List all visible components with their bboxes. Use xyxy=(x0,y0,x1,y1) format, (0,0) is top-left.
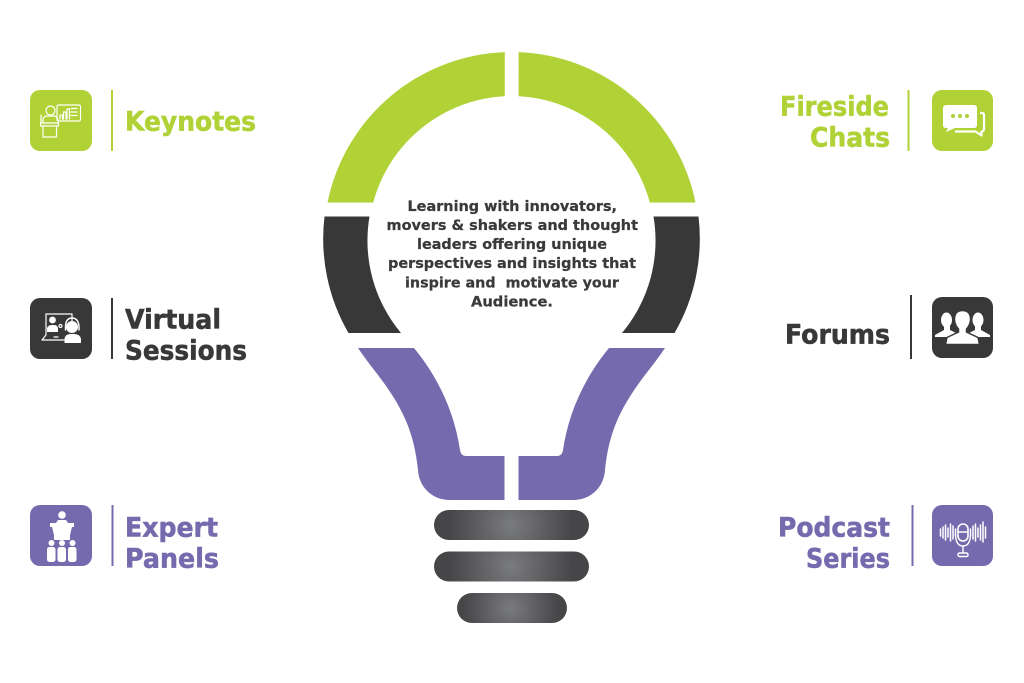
bulb middle left: dark xyxy=(323,216,401,333)
icon: laptop with video call xyxy=(30,298,92,359)
item: Expert Panels xyxy=(30,505,219,574)
divider xyxy=(111,90,113,151)
central description text: Learning with innovators, xyxy=(408,199,617,215)
label xyxy=(780,92,890,154)
central description text xyxy=(386,199,638,310)
bulb base bar 2 xyxy=(434,552,589,582)
label: Chats xyxy=(810,122,890,154)
label: Series xyxy=(806,544,890,574)
bulb base bar 3 xyxy=(457,593,567,623)
label: Virtual xyxy=(125,304,221,336)
central description text: perspectives and insights that xyxy=(388,256,636,272)
bulb neck left: purple xyxy=(358,348,504,500)
icon: speaker at podium with panel xyxy=(30,505,92,566)
label xyxy=(125,304,247,366)
bulb neck right: purple xyxy=(518,348,665,500)
label xyxy=(125,512,219,574)
label: Expert xyxy=(125,512,218,544)
divider xyxy=(912,505,914,566)
divider xyxy=(910,295,912,359)
label xyxy=(778,512,890,574)
light bulb xyxy=(323,52,700,623)
bulb top right: green xyxy=(519,52,696,202)
label: Sessions xyxy=(125,336,247,366)
item: Forums xyxy=(785,295,993,359)
bulb base bar 1 xyxy=(434,510,589,540)
bulb top left: green xyxy=(328,52,505,202)
icon: chat bubbles xyxy=(932,90,993,151)
label: Fireside xyxy=(780,92,889,122)
label: Podcast xyxy=(778,512,890,544)
central description text: Audience. xyxy=(471,294,553,310)
label: Keynotes xyxy=(125,106,256,138)
central description text: movers & shakers and thought xyxy=(386,218,638,234)
label: Panels xyxy=(125,544,219,574)
item: Virtual Sessions xyxy=(30,298,247,366)
item: Podcast Series xyxy=(778,505,993,574)
divider xyxy=(111,298,113,359)
central description text: leaders offering unique xyxy=(417,237,607,253)
label: Forums xyxy=(785,320,890,350)
divider xyxy=(112,505,114,566)
item: Keynotes xyxy=(30,90,256,151)
icon: presenter at podium with chart xyxy=(30,90,92,151)
central description text: inspire and motivate your xyxy=(405,276,620,292)
icon: group of three people xyxy=(932,297,993,358)
icon: microphone with sound wave xyxy=(932,505,993,566)
bulb middle right: dark xyxy=(622,216,700,333)
item: Fireside Chats xyxy=(780,90,993,154)
divider xyxy=(908,90,910,151)
